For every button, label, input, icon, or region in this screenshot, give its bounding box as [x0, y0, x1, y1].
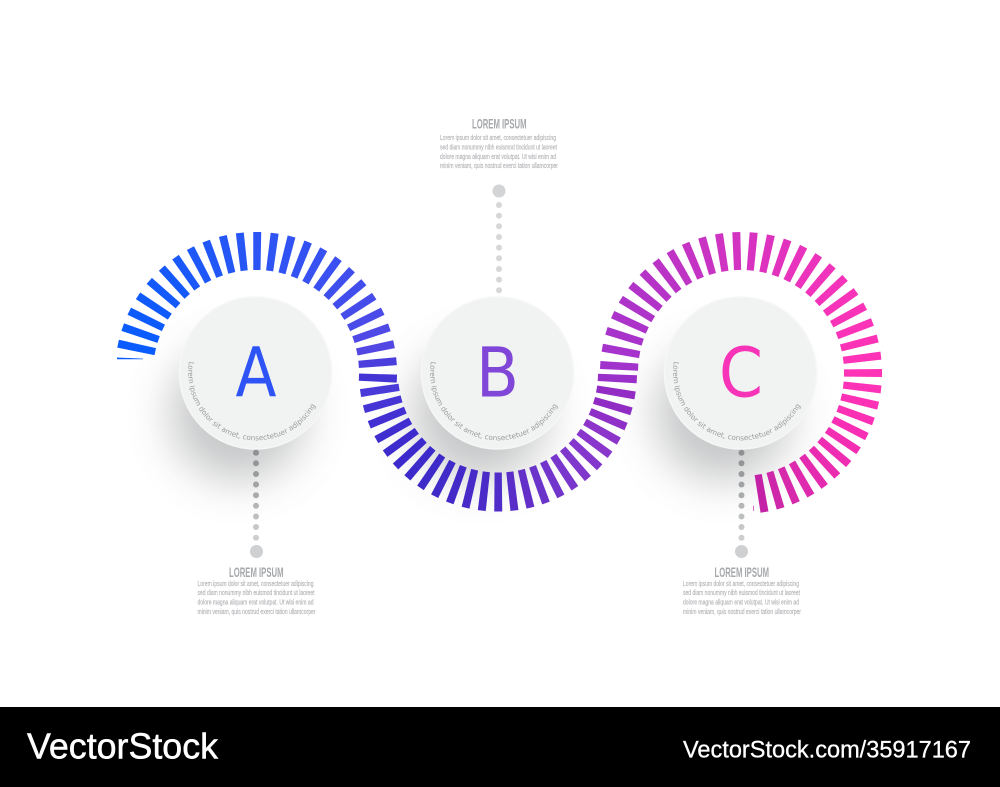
- body A: minim veniam, quis nostrud exerci tation ullamcorper: [198, 609, 316, 616]
- dotted connector C: [735, 450, 748, 558]
- body B: sed diam nonummy nibh euismod tincidunt ut laoreet: [440, 144, 557, 151]
- body B: dolore magna aliquam erat volutpat. Ut wisi enim ad: [440, 154, 556, 161]
- disc A: [180, 297, 332, 449]
- disc B: [422, 297, 574, 449]
- dotted connector B: [492, 184, 506, 293]
- ribbon arc B: indigo to purple: [360, 373, 637, 512]
- body A: sed diam nonummy nibh euismod tincidunt ut laoreet: [198, 590, 315, 597]
- letter A: A: [236, 334, 276, 414]
- body B: [440, 135, 558, 170]
- body B: minim veniam, quis nostrud exerci tation ullamcorper: [440, 163, 558, 170]
- letter C: C: [719, 334, 763, 414]
- text block C: [683, 564, 801, 616]
- heading B: LOREM IPSUM: [472, 116, 526, 132]
- body C: [683, 581, 801, 616]
- dotted connector A: [250, 450, 263, 558]
- ribbon arc C: magenta: [600, 232, 882, 513]
- heading C: LOREM IPSUM: [714, 564, 769, 580]
- panel: circle A: [179, 296, 331, 450]
- body B: Lorem ipsum dolor sit amet, consectetuer adipiscing: [440, 135, 556, 142]
- text block B: [440, 116, 558, 170]
- ribbon start sliver: [117, 358, 143, 359]
- body C: Lorem ipsum dolor sit amet, consectetuer adipiscing: [683, 581, 799, 588]
- footer banner: [0, 707, 1000, 787]
- body A: Lorem ipsum dolor sit amet, consectetuer adipiscing: [198, 581, 314, 588]
- brand name: VectorStock: [27, 725, 219, 766]
- ribbon arc A: blue: [117, 232, 397, 383]
- curved caption B: Lorem ipsum dolor sit amet, consectetuer adipiscing: [430, 362, 558, 440]
- body A: [198, 581, 316, 616]
- shadow: circle A: [171, 346, 305, 480]
- body C: sed diam nonummy nibh euismod tincidunt ut laoreet: [683, 590, 800, 597]
- shadow: circle B: [413, 346, 547, 480]
- curved caption C: Lorem ipsum dolor sit amet, consectetuer adipiscing: [673, 362, 801, 440]
- panel: circle B: [421, 296, 573, 450]
- letter B: B: [476, 334, 519, 414]
- heading A: LOREM IPSUM: [229, 564, 284, 580]
- body C: dolore magna aliquam erat volutpat. Ut wisi enim ad: [683, 600, 799, 607]
- panel: circle C: [664, 296, 816, 450]
- ribbon end sliver: [753, 506, 754, 511]
- body A: dolore magna aliquam erat volutpat. Ut wisi enim ad: [198, 600, 314, 607]
- serpentine striped ribbon: [117, 232, 882, 513]
- banner background: [0, 707, 1000, 787]
- disc C: [664, 297, 816, 449]
- shadow: circle C: [656, 346, 790, 480]
- curved caption A: Lorem ipsum dolor sit amet, consectetuer adipiscing: [188, 362, 316, 440]
- text block A: [198, 564, 316, 616]
- image url: VectorStock.com/35917167: [683, 738, 971, 764]
- body C: minim veniam, quis nostrud exerci tation ullamcorper: [683, 609, 801, 616]
